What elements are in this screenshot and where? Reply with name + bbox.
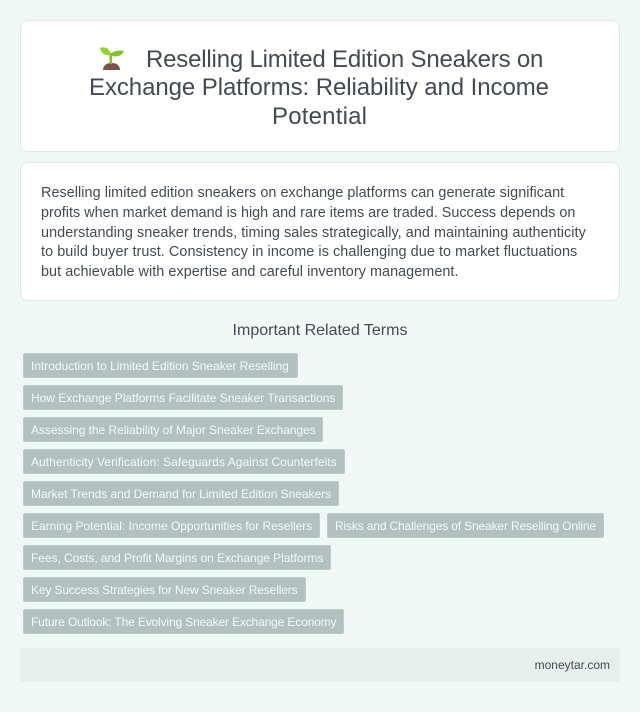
title panel [20,20,620,152]
title: Reselling Limited Edition Sneakers on [146,46,543,73]
intro text: Reselling limited edition sneakers on exchange platforms can generate significant [41,185,564,201]
intro text: profits when market demand is high and rare items are traded. Success depends on [41,205,575,221]
intro text: understanding sneaker trends, timing sales strategically, and maintaining authenticity [41,225,586,241]
footer bar [20,648,620,682]
tag: Authenticity Verification: Safeguards Against Counterfeits [31,455,337,469]
tag [23,385,343,410]
intro text: to build buyer trust. Consistency in income is challenging due to market fluctuations [41,244,577,260]
tag: Risks and Challenges of Sneaker Reselling Online [335,519,596,533]
tag [23,449,345,474]
tag [23,481,339,506]
title: Potential [272,103,367,130]
tag [23,513,320,538]
tag: Fees, Costs, and Profit Margins on Exchange Platforms [31,551,323,565]
tag: Future Outlook: The Evolving Sneaker Exchange Economy [31,615,336,629]
tag [23,353,298,378]
tag [327,513,604,538]
tag: Key Success Strategies for New Sneaker Resellers [31,583,298,597]
tag [23,545,331,570]
source: moneytar.com [535,658,610,672]
title: Exchange Platforms: Reliability and Income [89,74,549,101]
title [89,46,549,130]
tag: Earning Potential: Income Opportunities for Resellers [31,519,312,533]
tag [23,609,344,634]
icon: sprout [100,47,124,70]
intro text [41,185,586,280]
intro text: but achievable with expertise and careful inventory management. [41,264,459,280]
tag [23,417,323,442]
tag: Market Trends and Demand for Limited Edition Sneakers [31,487,331,501]
tag [23,577,306,602]
tag: Assessing the Reliability of Major Sneaker Exchanges [31,423,316,437]
section heading: Important Related Terms [233,322,407,339]
tag: Introduction to Limited Edition Sneaker Reselling [31,359,289,373]
intro panel [20,162,620,301]
tag list [23,353,604,634]
tag: How Exchange Platforms Facilitate Sneaker Transactions [31,391,335,405]
